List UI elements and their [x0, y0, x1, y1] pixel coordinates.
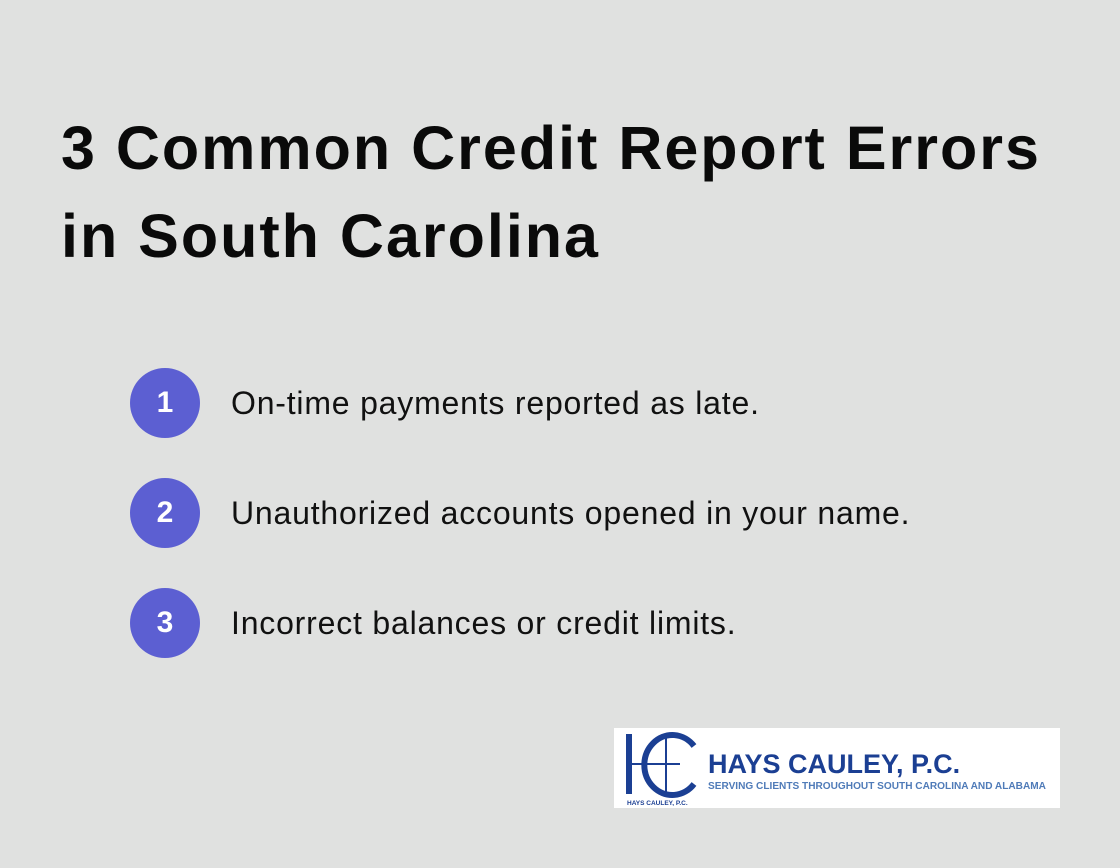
icon: HC monogram [629, 734, 694, 795]
number badge 3 [130, 588, 200, 658]
list item 1 [130, 368, 760, 438]
list item 2 [130, 478, 910, 548]
brand name: HAYS CAULEY, P.C. [708, 749, 960, 779]
list item 3 [130, 588, 736, 658]
number badge 2: 2 [157, 496, 173, 529]
title: in South Carolina [61, 202, 600, 270]
title: 3 Common Credit Report Errors [61, 114, 1041, 182]
number badge 3: 3 [157, 606, 173, 639]
tagline: SERVING CLIENTS THROUGHOUT SOUTH CAROLINA AND ALABAMA [708, 781, 1047, 792]
number badge 2 [130, 478, 200, 548]
item text 1: On-time payments reported as late. [231, 385, 760, 421]
item text 2: Unauthorized accounts opened in your name. [231, 495, 910, 531]
number badge 1: 1 [157, 386, 173, 419]
item text 3: Incorrect balances or credit limits. [231, 605, 736, 641]
small caption: HAYS CAULEY, P.C. [627, 800, 688, 807]
logo [614, 728, 1060, 808]
number badge 1 [130, 368, 200, 438]
title [61, 114, 1041, 270]
